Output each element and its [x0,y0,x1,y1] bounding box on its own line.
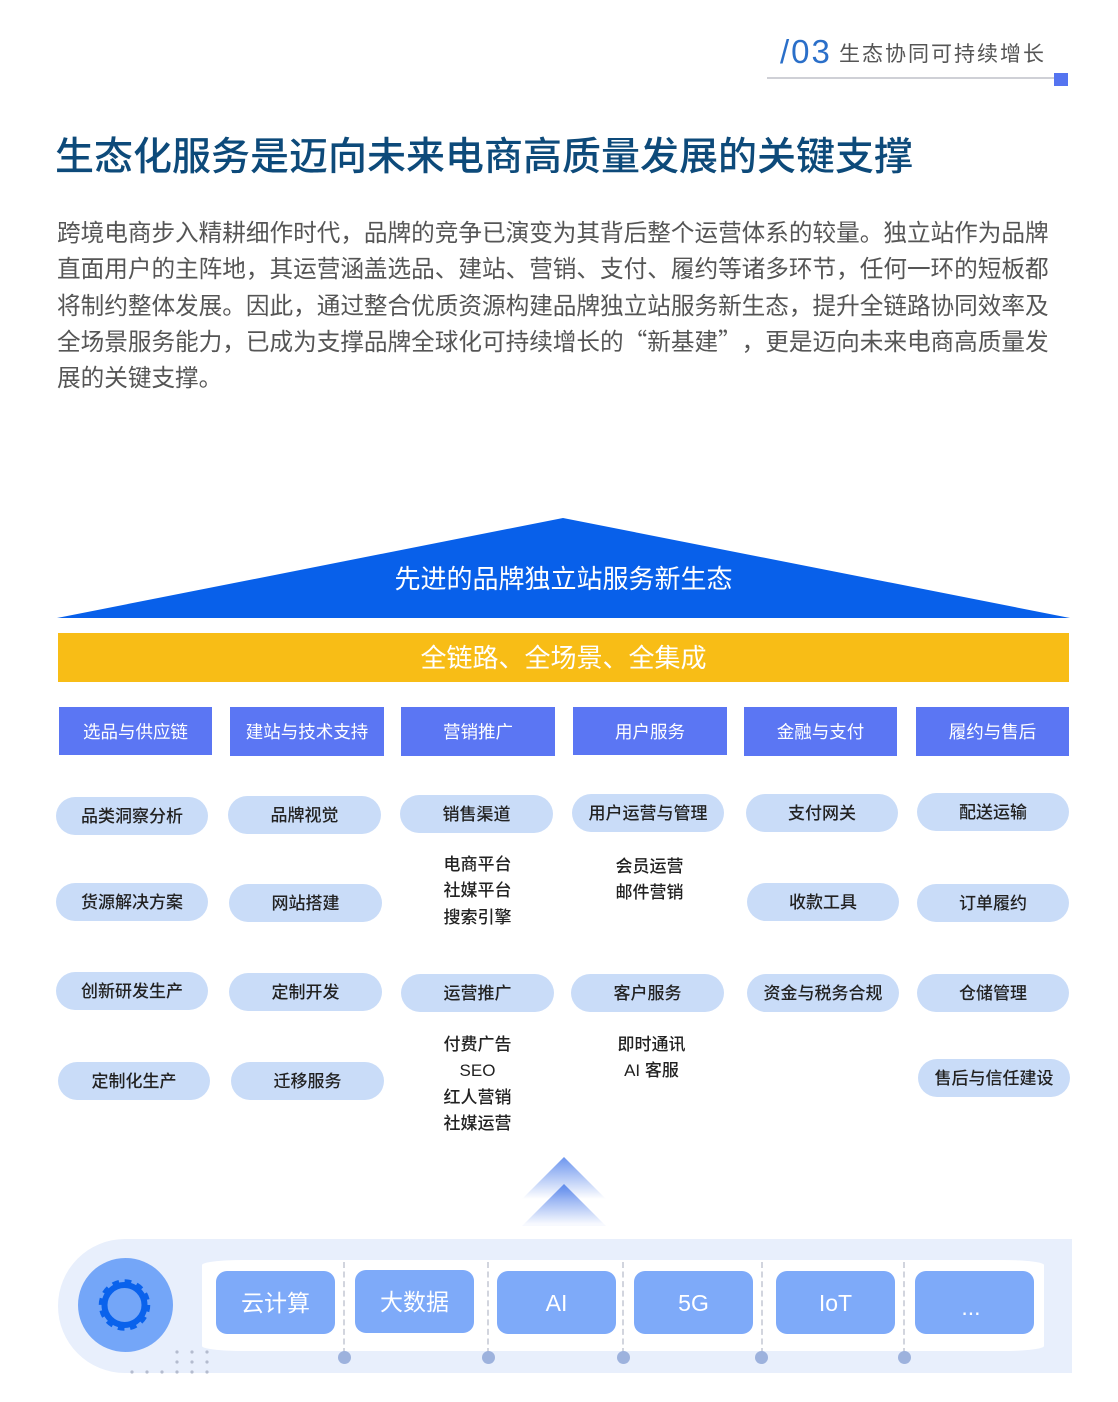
technology foundation band [58,1239,1072,1373]
intro paragraph: 展的关键支撑。 [57,366,222,392]
pill: 定制化生产: 定制化生产 [92,1072,176,1091]
tech card: ellipsis [915,1271,1034,1334]
header rule [767,77,1055,79]
section header: 03 [767,33,1068,86]
column header: 建站与技术支持: 建站与技术支持 [246,722,368,742]
pill: 售后与信任建设: 售后与信任建设 [934,1069,1054,1088]
connector: divider 3 [622,1262,624,1354]
title: 生态化服务是迈向未来电商高质量发展的关键支撑 [55,136,913,179]
list: sales channels: 搜索引擎 [444,908,512,927]
column header: 履约与售后: 履约与售后 [949,722,1036,742]
column header: 用户服务 [573,707,727,755]
intro paragraph: 直面用户的主阵地，其运营涵盖选品、建站、营销、支付、履约等诸多环节，任何一环的短板都 [57,257,1049,283]
tech card: 5G: 5G [678,1290,709,1316]
roof triangle: new ecosystem [57,518,1070,618]
intro paragraph [57,220,1049,392]
connector dot 2 [482,1351,495,1364]
pill: 用户运营与管理: 用户运营与管理 [588,804,708,823]
pill: 订单履约: 订单履约 [959,894,1027,913]
pill: 定制开发 [229,973,382,1011]
column header: 选品与供应链 [59,707,212,755]
tech card: AI: AI [546,1290,567,1316]
list: operations promotion [444,1035,512,1133]
list: customer service: AI 客服 [624,1061,679,1080]
connector dot 5 [898,1351,911,1364]
column header: 金融与支付: 金融与支付 [777,722,864,742]
list: operations promotion: 红人营销 [444,1088,512,1107]
tech card: IoT: IoT [819,1290,852,1316]
list: customer service: 即时通讯 [618,1035,686,1054]
pill: 品类洞察分析: 品类洞察分析 [81,807,183,826]
pill: 仓储管理: 仓储管理 [959,984,1027,1003]
tech card: IoT [776,1271,895,1334]
pill: 定制化生产 [58,1062,210,1100]
column header: 建站与技术支持 [230,707,384,756]
pill: 客户服务 [571,974,724,1012]
pill: 支付网关: 支付网关 [788,804,856,823]
tech card: ellipsis: ... [961,1294,981,1320]
list: sales channels [444,855,512,927]
column header: 金融与支付 [744,707,897,756]
column header: 营销推广 [401,707,555,756]
yellow banner: 全链路、全场景、全集成 [420,643,706,673]
pill: 仓储管理 [917,974,1069,1012]
pill: 用户运营与管理 [572,794,724,832]
pill: 配送运输 [917,793,1069,831]
pill: 收款工具 [747,883,899,921]
column header: 选品与供应链: 选品与供应链 [83,722,188,742]
pill: 创新研发生产 [56,972,208,1010]
list: customer service [618,1035,686,1080]
icon: gear in circle [78,1258,173,1352]
column header: 履约与售后 [916,707,1069,756]
icon: double up arrow [524,1157,603,1224]
list: operations promotion: 社媒运营 [444,1114,512,1133]
pill: 支付网关 [746,794,898,832]
intro paragraph: 跨境电商步入精耕细作时代，品牌的竞争已演变为其背后整个运营体系的较量。独立站作为品牌 [57,221,1049,247]
tech card: 大数据 [355,1270,474,1333]
pill: 售后与信任建设 [918,1059,1070,1097]
pill: 货源解决方案: 货源解决方案 [81,893,183,912]
pill: 品牌视觉: 品牌视觉 [270,806,338,825]
connector dot 3 [617,1351,630,1364]
list: user operations [616,857,684,902]
pill: 定制开发: 定制开发 [272,983,340,1002]
roof label: 先进的品牌独立站服务新生态 [394,564,732,594]
list: operations promotion: 付费广告 [444,1035,512,1054]
list: operations promotion: SEO [460,1061,495,1080]
connector dot 1 [338,1351,351,1364]
section name: 生态协同可持续增长 [839,43,1046,66]
pill: 网站搭建: 网站搭建 [272,894,340,913]
pill: 运营推广 [401,974,554,1012]
list: user operations: 会员运营 [616,857,684,876]
pill: 品类洞察分析 [56,797,208,835]
tech card: 云计算 [216,1271,335,1334]
pill: 订单履约 [917,884,1069,922]
list: sales channels: 电商平台 [444,855,512,874]
dot grid decoration [130,1350,208,1374]
pill: 运营推广: 运营推广 [444,984,512,1003]
pill: 销售渠道 [400,795,553,833]
tech card: 5G [634,1271,753,1334]
pill: 创新研发生产: 创新研发生产 [81,982,183,1001]
connector: divider 2 [487,1262,489,1354]
pill: 迁移服务: 迁移服务 [274,1072,342,1091]
intro paragraph: 将制约整体发展。因此，通过整合优质资源构建品牌独立站服务新生态，提升全链路协同效率及 [57,294,1049,320]
column header: 用户服务: 用户服务 [615,722,685,742]
list: user operations: 邮件营销 [616,883,684,902]
pill: 资金与税务合规: 资金与税务合规 [764,984,882,1003]
pill: 客户服务: 客户服务 [614,984,682,1003]
list: sales channels: 社媒平台 [444,881,512,900]
header square marker [1054,73,1068,86]
connector: divider 1 [343,1262,345,1354]
white inner tray [202,1260,1044,1351]
intro paragraph: 全场景服务能力，已成为支撑品牌全球化可持续增长的“新基建”，更是迈向未来电商高质量发 [57,323,1049,357]
pill: 销售渠道: 销售渠道 [442,805,510,824]
yellow banner [58,633,1069,682]
pill: 网站搭建 [229,884,382,922]
pill: 品牌视觉 [228,796,381,834]
connector dot 4 [755,1351,768,1364]
tech card: 云计算: 云计算 [241,1290,310,1316]
connector: divider 5 [903,1262,905,1354]
pill: 迁移服务 [231,1062,384,1100]
column header: 营销推广: 营销推广 [443,722,513,742]
pill: 收款工具: 收款工具 [789,893,857,912]
pill: 资金与税务合规 [747,974,899,1012]
section number: /03 [780,33,832,70]
tech card: AI [497,1271,616,1334]
connector: divider 4 [761,1262,763,1354]
tech card: 大数据: 大数据 [380,1289,449,1315]
pill: 配送运输: 配送运输 [959,803,1027,822]
pill: 货源解决方案 [56,883,208,921]
